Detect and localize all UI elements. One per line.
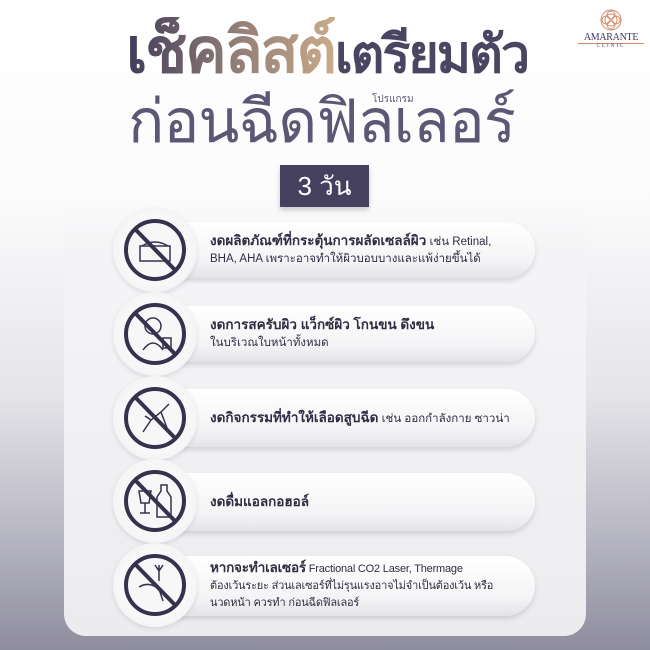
icon: no cream	[113, 208, 197, 292]
small label program: โปรแกรม	[372, 94, 414, 105]
item 2	[112, 292, 536, 378]
item 1: งดผลิตภัณฑ์ที่กระตุ้นการผลัดเซลล์ผิว เช่น Retinal,	[210, 233, 491, 248]
badge 3 days: 3 วัน	[297, 171, 352, 201]
icon: no laser	[113, 543, 197, 627]
item 4	[112, 460, 536, 544]
item 5	[112, 543, 536, 630]
logo	[578, 10, 644, 49]
icon: no exercise	[113, 376, 197, 460]
item 3	[112, 376, 536, 460]
badge 3 days	[280, 165, 369, 207]
title line 2: ก่อนฉีดฟิลเลอร์	[128, 88, 515, 155]
logo: CLINIC	[597, 44, 625, 49]
logo: AMARANTE	[584, 32, 638, 43]
icon: no alcohol	[113, 459, 197, 543]
panel: checklist	[64, 205, 586, 636]
item 2: งดการสครับผิว แว็กซ์ผิว โกนขน ดึงขน	[210, 317, 434, 332]
item 5: นวดหน้า ควรทำ ก่อนฉีดฟิลเลอร์	[210, 597, 359, 609]
icon: no waxing	[113, 292, 197, 376]
item 1	[112, 219, 536, 294]
title line 1: เช็คลิสต์เตรียมตัว	[126, 17, 528, 86]
item 1: BHA, AHA เพราะอาจทำให้ผิวบอบบางและแพ้ง่ายขึ้นได้	[210, 253, 481, 265]
item 5: ต้องเว้นระยะ ส่วนเลเซอร์ที่ไม่รุนแรงอาจไม่จำเป็นต้องเว้น หรือ	[210, 580, 493, 592]
item 3: งดกิจกรรมที่ทำให้เลือดสูบฉีด เช่น ออกกำลังกาย ซาวน่า	[210, 410, 510, 425]
item 5: หากจะทำเลเซอร์ Fractional CO2 Laser, Thermage	[210, 560, 463, 575]
item 4: งดดื่มแอลกอฮอล์	[210, 494, 309, 509]
item 2: ในบริเวณใบหน้าทั้งหมด	[210, 337, 329, 349]
